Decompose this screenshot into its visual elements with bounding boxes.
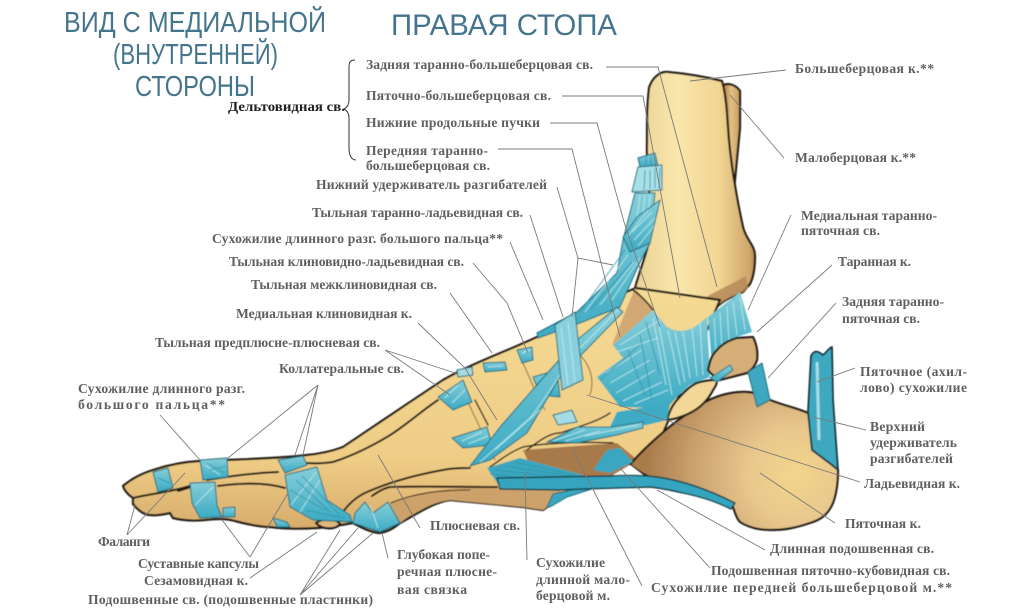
labels: bottom: речная плюсне- [397, 564, 497, 579]
labels: bottom: Длинная подошвенная св. [770, 541, 934, 556]
labels: left column: Сухожилие длинного разг. большого пальца** [212, 231, 503, 246]
title: view from medial side: (ВНУТРЕННЕЙ) [113, 37, 278, 71]
tibia lower shading [655, 276, 748, 328]
ligament: small tendon strip [710, 365, 733, 382]
bracket of deltoid ligament [344, 60, 356, 160]
labels: bottom: Сухожилие [536, 555, 605, 570]
labels: left column: Тыльная клиновидно-ладьевидная св. [229, 254, 464, 269]
title: view from medial side: СТОРОНЫ [135, 71, 255, 103]
ligament: medial deltoid [597, 310, 710, 408]
labels: bottom: Пяточная к. [845, 516, 921, 531]
foot illustration [123, 72, 838, 533]
bone: talus process [708, 337, 757, 380]
ligament: plantar sheet [487, 448, 735, 509]
labels: deltoid group: Нижние продольные пучки [366, 115, 540, 130]
labels: bottom: Фаланги [98, 534, 150, 549]
labels: left column: Нижний удерживатель разгибателей [316, 177, 547, 192]
labels: left column: большого пальца** [78, 397, 225, 412]
sesamoid bone [316, 519, 340, 528]
labels: deltoid group: большеберцовая св. [366, 158, 490, 173]
labels: bottom: длинной мало- [536, 572, 630, 587]
labels: right column: Большеберцовая к.** [795, 61, 934, 76]
labels: bottom: Суставные капсулы [138, 556, 259, 571]
labels: left column: Тыльная таранно-ладьевидная св. [312, 205, 523, 220]
labels: left column: Медиальная клиновидная к. [236, 306, 412, 321]
ligament: posterior talocalcaneal [748, 363, 770, 407]
labels: right column: Медиальная таранно- [801, 208, 937, 223]
labels: bottom: Глубокая попе- [397, 547, 490, 562]
labels: left column: Коллатеральные св. [279, 361, 404, 376]
labels: deltoid group: Пяточно-большеберцовая св. [366, 88, 551, 103]
ligament: upper retinaculum [623, 153, 662, 252]
labels: right column: Задняя таранно- [842, 294, 944, 309]
labels: right column: лово) сухожилие [860, 380, 967, 396]
title: right foot: ПРАВАЯ СТОПА [391, 9, 617, 42]
bone: main foot skeleton [123, 288, 720, 533]
region: lower metatarsal tone [390, 487, 560, 523]
leader lines [127, 67, 866, 595]
labels: bottom: Подошвенные св. (подошвенные пластинки) [88, 592, 373, 608]
labels: bottom: вая связка [397, 582, 467, 597]
labels: deltoid group: Задняя таранно-большеберцовая св. [366, 57, 593, 72]
bone: calcaneus [630, 392, 838, 530]
ligament: small bands of midfoot [438, 347, 577, 448]
labels: right column: Верхний [870, 419, 925, 434]
tendons of extensor [470, 193, 655, 466]
labels: bottom: берцовой м. [536, 588, 610, 603]
ligament: deltoid lower sheet [547, 403, 670, 443]
title: view from medial side [64, 5, 326, 103]
region: bones under midfoot (brown) [523, 443, 650, 478]
labels: left column: Тыльная предплюсне-плюсневая св. [155, 335, 380, 350]
ligament: vertical band over tendons [555, 312, 583, 390]
labels: right column: удерживатель [870, 435, 957, 450]
labels: bottom [88, 516, 952, 608]
labels: right column: Пяточное (ахил- [860, 364, 967, 380]
labels: bottom: Сухожилие передней большеберцовой м.** [651, 580, 952, 595]
bone: fibula [722, 84, 740, 195]
white gap under arch [613, 465, 643, 475]
labels: right column: пяточная св. [801, 223, 880, 238]
bone: sustentaculum [667, 380, 717, 420]
metatarsal outlines [133, 290, 653, 512]
region: tan neck of talus [612, 288, 653, 345]
title: view from medial side: ВИД С МЕДИАЛЬНОЙ [64, 5, 326, 39]
bone: tibia [635, 72, 755, 328]
labels: bottom: Подошвенная пяточно-кубовидная св. [711, 563, 950, 578]
labels: deltoid group [228, 57, 593, 173]
labels: right column: Малоберцовая к.** [795, 150, 916, 165]
labels: right column [795, 61, 967, 491]
labels: right column: Ладьевидная к. [864, 476, 960, 491]
labels: right column: Таранная к. [838, 254, 911, 269]
labels: left column: Тыльная межклиновидная св. [251, 277, 437, 292]
labels: bottom: Плюсневая св. [430, 518, 520, 533]
labels: right column: пяточная св. [842, 311, 920, 326]
ligament: toe capsules [153, 456, 400, 532]
achilles tendon [808, 347, 838, 470]
labels: deltoid group: Передняя таранно- [366, 143, 488, 158]
ligament: medial talocalcaneal [708, 292, 752, 365]
labels: deltoid group: Дельтовидная св. [228, 99, 345, 114]
labels: left column: Сухожилие длинного разг. [78, 381, 245, 396]
labels: bottom: Сезамовидная к. [144, 573, 248, 588]
labels: right column: разгибателей [870, 451, 953, 466]
labels: left column [78, 177, 547, 412]
